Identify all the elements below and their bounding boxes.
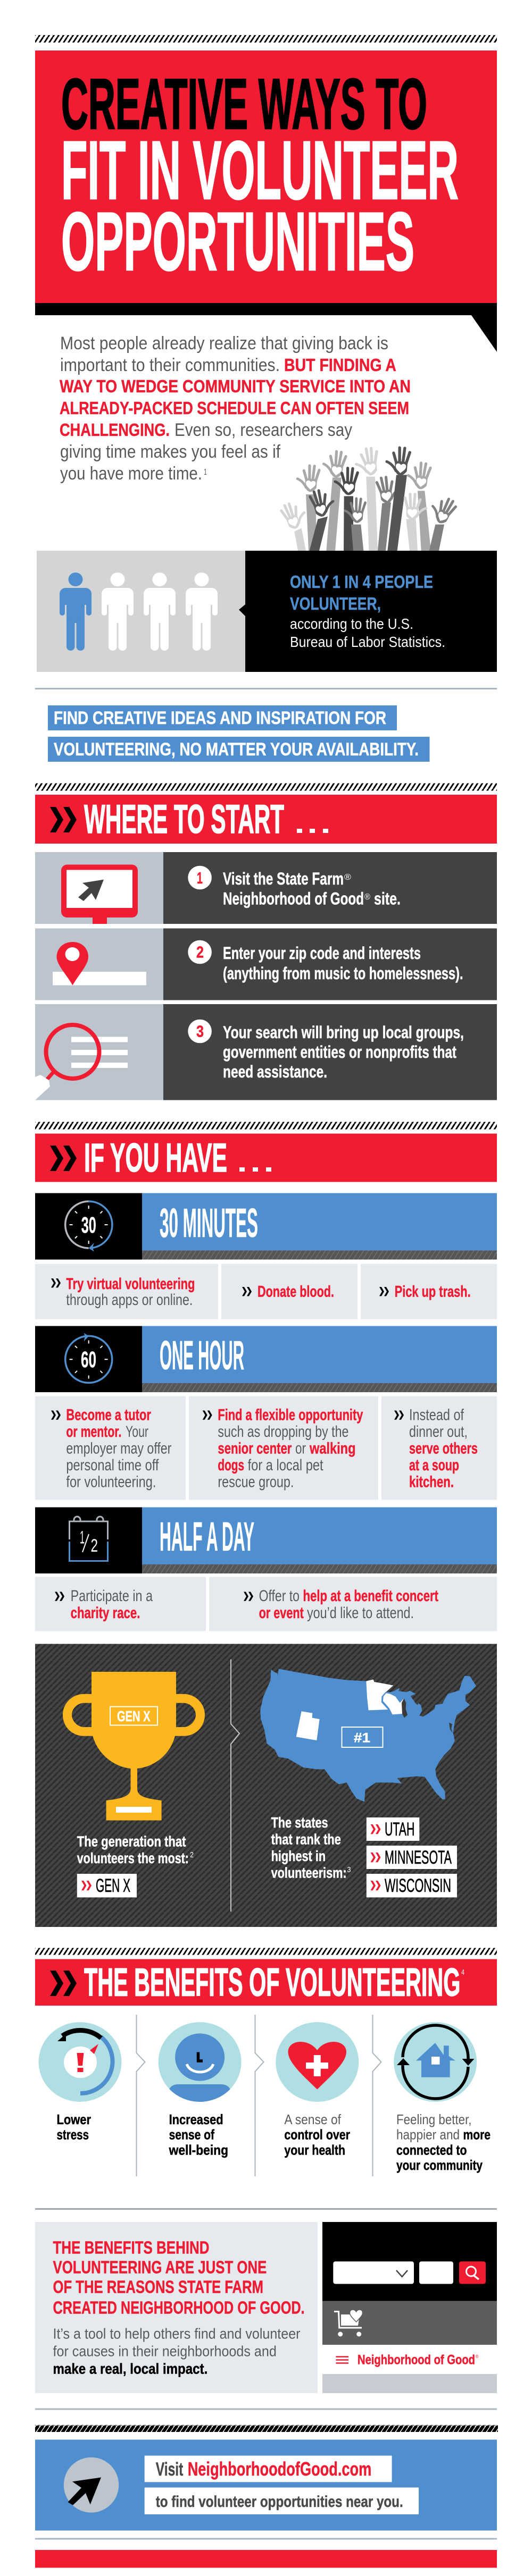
icon: smiling person [159, 2022, 242, 2102]
panel: 30 minutes header: 30 MINUTES [160, 1200, 258, 1246]
text block: states: that rank the [271, 1831, 341, 1848]
icon: 60 minute clock: 60 [81, 1347, 96, 1373]
panel: one hour ideas [35, 1396, 497, 1500]
text block: introduction: 1 [204, 468, 207, 477]
panel: call to action [35, 2440, 497, 2530]
panel: one hour ideas: such as dropping by the [218, 1423, 348, 1441]
text block: states: 3 [347, 1865, 351, 1874]
panel: half a day ideas: or event [259, 1604, 304, 1622]
benefit: lower stress [38, 2022, 121, 2143]
text block: step 3: Your search will bring up local groups, [223, 1023, 464, 1042]
panel: one hour ideas: kitchen. [409, 1474, 454, 1491]
icon: house in cycle [394, 2022, 477, 2102]
panel: one hour ideas: personal time off [66, 1457, 159, 1474]
panel: one hour ideas: Become a tutor [66, 1407, 151, 1424]
panel: benefits behind volunteering: It’s a tool to help others find and volunteer [53, 2325, 300, 2342]
text block: introduction: you have more time. [60, 464, 202, 484]
benefit: connected to community: connected to [396, 2142, 467, 2158]
benefit: connected to community [394, 2022, 491, 2173]
text block: introduction: CHALLENGING. [60, 420, 170, 440]
panel: one hour ideas: or mentor. [66, 1423, 121, 1441]
label: Wisconsin: WISCONSIN [385, 1875, 451, 1896]
text: visit website: Visit [156, 2459, 184, 2480]
map: United States [260, 1669, 476, 1801]
panel: one hour header: ONE HOUR [160, 1333, 244, 1378]
panel: one hour ideas: Your [126, 1423, 148, 1441]
icon: stress gauge [38, 2022, 121, 2102]
panel: one hour ideas: dinner out, [409, 1423, 468, 1441]
text block: introduction: giving time makes you feel as if [60, 442, 280, 462]
label: gen x: GEN X [96, 1875, 130, 1896]
text block: statistic: ONLY 1 IN 4 PEOPLE [290, 572, 433, 592]
benefit: well-being: sense of [169, 2127, 214, 2143]
text block: states: volunteerism: [271, 1865, 347, 1881]
panel: half a day ideas: Participate in a [71, 1587, 153, 1605]
icon: monitor with cursor [61, 864, 138, 924]
panel: benefits behind volunteering: for causes in their neighborhoods and [53, 2343, 277, 2360]
panel: one hour ideas: Instead of [409, 1407, 464, 1424]
panel: step 1 [35, 852, 497, 924]
panel: benefits behind volunteering: CREATED NEIGHBORHOOD OF GOOD. [53, 2297, 305, 2317]
logo: Neighborhood of Good: Neighborhood of Good [358, 2353, 475, 2368]
panel: step 2 [35, 928, 497, 1000]
text block: step 3 [223, 1023, 464, 1081]
text block: generation: 2 [190, 1850, 194, 1859]
text block: step 3: need assistance. [223, 1062, 327, 1081]
panel: benefits behind volunteering: VOLUNTEERING ARE JUST ONE [53, 2257, 267, 2277]
panel: step 3: 3 [196, 1022, 204, 1041]
state: Utah [296, 1711, 320, 1740]
logo: Neighborhood of Good: ® [476, 2354, 479, 2359]
text block: states [271, 1814, 351, 1881]
text block: statistic: according to the U.S. [290, 616, 413, 632]
icon: half-day calendar [69, 1517, 107, 1561]
text block: introduction: important to their communities. [60, 355, 280, 375]
search form [333, 2261, 486, 2284]
hatched strip: lower [35, 2425, 498, 2432]
text block: states: highest in [271, 1848, 326, 1864]
panel: one hour ideas: rescue group. [218, 1474, 294, 1491]
benefit: control over health: A sense of [284, 2111, 342, 2127]
panel: benefits behind volunteering [35, 2222, 318, 2393]
panel: half a day ideas: help at a benefit concert [303, 1587, 438, 1605]
panel: 30 minute ideas: Donate blood. [257, 1283, 334, 1300]
hatched strip: top [35, 35, 497, 43]
label: Minnesota [367, 1846, 457, 1869]
benefit: connected to community: Feeling better, [396, 2111, 471, 2127]
panel: one hour ideas: for a local pet [248, 1457, 323, 1474]
panel: one hour ideas: or [295, 1439, 306, 1458]
text block: step 2: Enter your zip code and interests [223, 944, 421, 963]
panel: half a day ideas [35, 1577, 497, 1631]
panel: 30 minutes header [35, 1193, 497, 1260]
icon: arrow in circle [64, 2457, 119, 2513]
callout: find creative ideas: FIND CREATIVE IDEAS AND INSPIRATION FOR [54, 708, 386, 728]
label: gen x [77, 1874, 137, 1897]
icon: shopping cart with heart [334, 2310, 363, 2337]
heading: if you have: IF YOU HAVE [84, 1135, 227, 1181]
text block: generation: volunteers the most: [77, 1850, 189, 1866]
panel: benefits behind volunteering: OF THE REASONS STATE FARM [53, 2277, 263, 2296]
panel: one hour ideas: senior center [218, 1439, 292, 1458]
callout: find creative ideas: VOLUNTEERING, NO MATTER YOUR AVAILABILITY. [54, 739, 419, 760]
benefit: connected to community: more [463, 2127, 491, 2143]
benefit: connected to community: your community [396, 2157, 483, 2173]
text block: step 3: government entities or nonprofits that [223, 1042, 456, 1062]
text: visit website: NeighborhoodofGood.com [188, 2458, 371, 2480]
text block: introduction: BUT FINDING A [284, 355, 396, 375]
benefit: control over health: control over [284, 2127, 350, 2143]
text: find opportunities [145, 2488, 419, 2514]
icon: trophy [63, 1672, 205, 1820]
panel: 30 minute ideas [35, 1264, 497, 1319]
panel: one hour ideas: at a soup [409, 1457, 459, 1474]
panel: 30 minute ideas: Pick up trash. [395, 1283, 471, 1300]
heading: the benefits of volunteering: 4 [461, 1968, 464, 1977]
panel: benefits behind volunteering: make a real, local impact. [53, 2361, 207, 2377]
benefit: control over health [276, 2022, 359, 2158]
label: Utah: UTAH [385, 1819, 414, 1840]
panel: one hour ideas: serve others [409, 1439, 478, 1458]
text block: step 1: Neighborhood of Good [223, 889, 364, 908]
icon: map pin [53, 942, 146, 986]
text: visit website [145, 2456, 392, 2482]
label: Wisconsin [367, 1874, 457, 1897]
panel: website mockup [322, 2222, 497, 2393]
text block: statistic [290, 572, 445, 650]
label: Utah [367, 1817, 419, 1841]
benefit: well-being: Increased [169, 2111, 223, 2127]
label: Minnesota: MINNESOTA [385, 1847, 452, 1868]
icon: raised hands [280, 447, 458, 551]
panel: one hour ideas: dogs [218, 1457, 244, 1474]
panel: one hour header [35, 1326, 497, 1392]
panel: one hour ideas: for volunteering. [66, 1474, 156, 1491]
footer bar [35, 2550, 497, 2567]
benefit: well-being [159, 2022, 242, 2158]
text block: step 2 [223, 944, 463, 983]
benefit: lower stress: Lower [56, 2111, 91, 2127]
panel: one hour ideas: walking [309, 1439, 355, 1458]
text block: introduction [60, 333, 411, 484]
heading: if you have [35, 1133, 497, 1182]
panel: 30 minute ideas: Try virtual volunteering [66, 1275, 195, 1293]
callout: find creative ideas [48, 705, 430, 762]
icon: trophy: GEN X [117, 1708, 151, 1724]
panel: step 2: 2 [196, 943, 204, 961]
text block: statistic: VOLUNTEER, [290, 594, 381, 613]
panel: one hour ideas: employer may offer [66, 1439, 171, 1458]
text block: introduction: WAY TO WEDGE COMMUNITY SERVICE INTO AN [60, 376, 411, 396]
text block: step 1: ® [364, 893, 370, 902]
label: #1 [342, 1727, 383, 1747]
text block: introduction: Even so, researchers say [174, 420, 352, 440]
panel: half a day ideas: Offer to [259, 1587, 300, 1605]
text block: step 1: Visit the State Farm [223, 869, 344, 888]
icon: half-day calendar: 2 [90, 1536, 98, 1556]
panel: benefits behind volunteering: THE BENEFITS BEHIND [53, 2238, 210, 2258]
benefit: connected to community: happier and [396, 2127, 460, 2143]
panel: 1 in 4 statistic [37, 551, 497, 672]
benefit: control over health: your health [284, 2142, 345, 2158]
title [61, 64, 459, 288]
benefit: well-being: well-being [169, 2142, 228, 2158]
state: Minnesota [366, 1679, 393, 1710]
text block: statistic: Bureau of Labor Statistics. [290, 634, 445, 650]
text block: step 1: site. [374, 889, 401, 908]
text block: step 1: ® [344, 873, 351, 882]
panel: half a day header [35, 1508, 497, 1573]
label: #1: #1 [354, 1731, 370, 1746]
icon: half-day calendar: 1 [80, 1528, 85, 1548]
panel: step 1: 1 [197, 869, 203, 887]
icon: four people, one highlighted [60, 573, 218, 651]
panel: one hour ideas: Find a flexible opportunity [218, 1407, 363, 1424]
panel: who volunteers [35, 1644, 497, 1927]
icon: 30 minute clock [65, 1201, 112, 1251]
panel: half a day ideas: you’d like to attend. [307, 1604, 414, 1622]
text block: step 1 [223, 869, 401, 908]
icon: 30 minute clock: 30 [81, 1213, 96, 1238]
text block: states: The states [271, 1814, 328, 1831]
panel: 30 minute ideas: through apps or online. [66, 1291, 193, 1309]
panel: half a day header: HALF A DAY [160, 1514, 254, 1560]
heading: where to start: WHERE TO START [84, 797, 284, 842]
icon: 60 minute clock [65, 1333, 112, 1383]
text block: introduction: Most people already realize that giving back is [60, 333, 388, 353]
state: Wisconsin [383, 1693, 404, 1714]
text block: introduction: ALREADY-PACKED SCHEDULE CAN OFTEN SEEM [60, 398, 409, 418]
panel: half a day ideas: charity race. [71, 1604, 140, 1622]
panel: title banner [35, 50, 497, 352]
text block: generation [77, 1833, 194, 1866]
benefit: lower stress: stress [56, 2127, 89, 2143]
text: find opportunities: to find volunteer opportunities near you. [156, 2493, 403, 2511]
icon: magnifier over text [35, 1025, 128, 1100]
text block: generation: The generation that [77, 1833, 186, 1850]
panel: step 3 [35, 1004, 497, 1100]
icon: heart with cross [276, 2022, 359, 2102]
